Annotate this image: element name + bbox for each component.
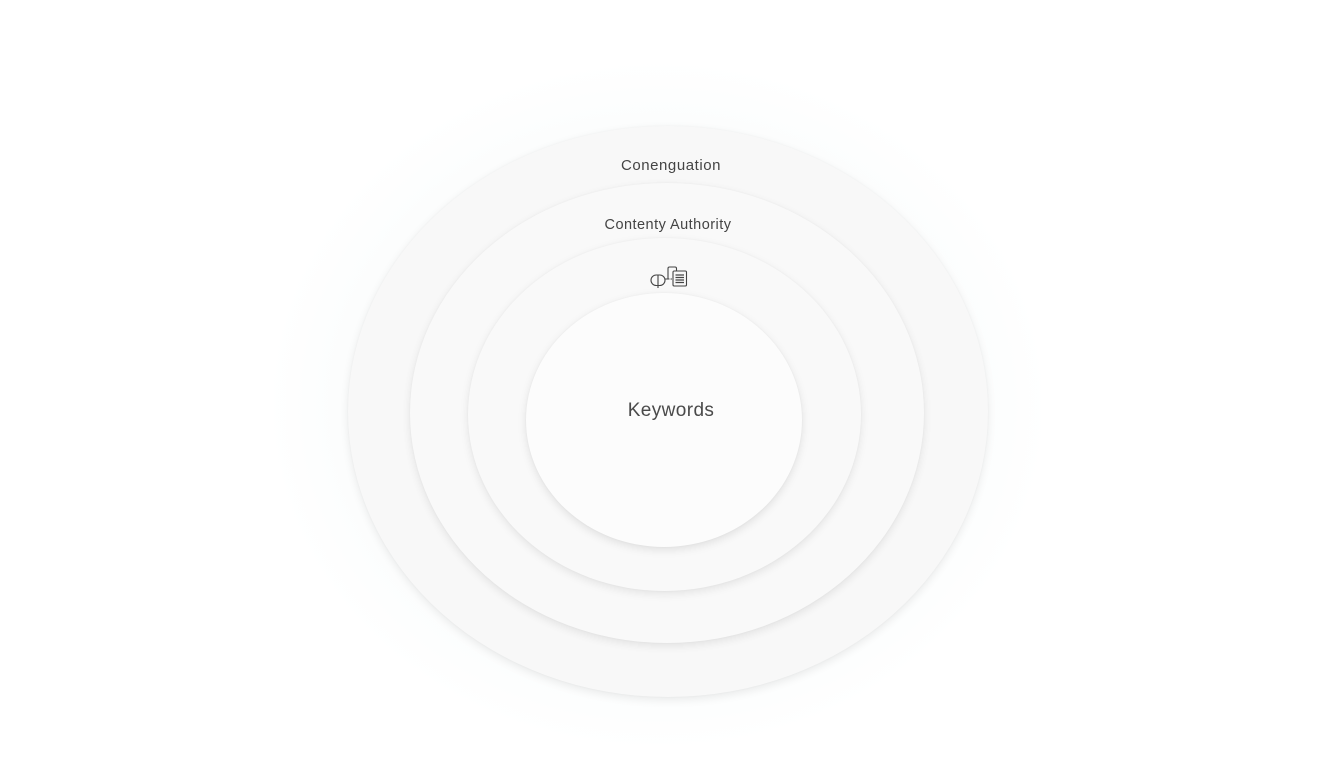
background halo: [268, 60, 1048, 750]
ring: core Keywords circle: [526, 293, 802, 547]
ring: outer Conengugation layer: [348, 126, 988, 697]
ring: Contenty Authority layer: [410, 183, 924, 643]
label: Contenty Authority: Contenty Authority: [605, 217, 731, 233]
icon: link and documents: [650, 266, 688, 288]
label: Conenguation: Conenguation: [621, 157, 721, 174]
ring: icon layer: [468, 238, 861, 591]
diagram: concentric rings: [347, 140, 989, 700]
label: Keywords: Keywords: [628, 400, 714, 421]
